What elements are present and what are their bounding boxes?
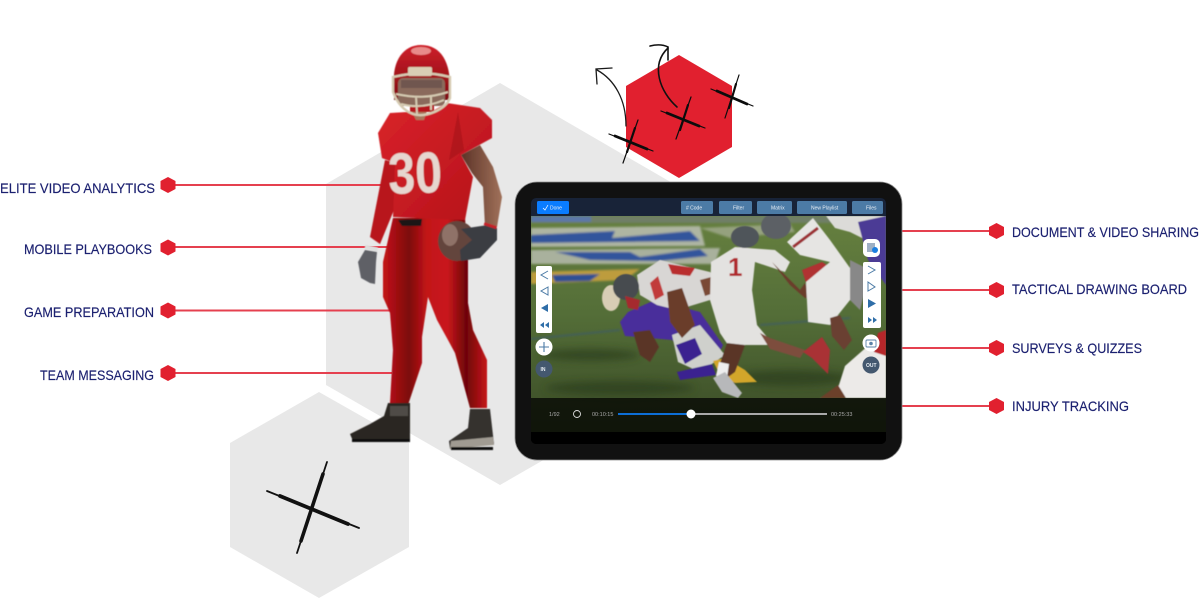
left glove (358, 245, 378, 284)
big brush X mark (267, 462, 359, 553)
video screen (531, 198, 886, 444)
in marker button (536, 360, 552, 378)
right cleat (449, 409, 494, 450)
right feature list (900, 223, 1199, 414)
control bar (531, 398, 886, 433)
callout: tactical drawing board: TACTICAL DRAWING BOARD (1012, 281, 1187, 297)
callout: injury tracking: INJURY TRACKING (1012, 398, 1129, 414)
in marker button: IN (540, 367, 546, 373)
matrix button (757, 201, 792, 214)
football (438, 221, 476, 261)
done button (537, 201, 569, 214)
left feature list (0, 177, 392, 383)
X mark centre (661, 97, 705, 139)
callout: team messaging (40, 365, 392, 383)
callout: document and video sharing (900, 223, 1199, 240)
tablet body (515, 182, 902, 460)
player number 1: 1 (728, 252, 742, 282)
playback timeline: 00:25:33 (831, 412, 852, 418)
large grey hexagon background (326, 83, 674, 485)
right arm (461, 145, 502, 227)
callout: tactical drawing board (900, 281, 1187, 298)
play diagram: X marks and arrows (596, 45, 753, 163)
callout: surveys and quizzes (900, 340, 1142, 356)
top bar (531, 198, 886, 216)
filter button (719, 201, 752, 214)
filter button: Filter (733, 206, 744, 212)
jersey top right (826, 216, 886, 310)
add button (536, 338, 552, 356)
neck (410, 108, 428, 120)
callout: injury tracking (900, 398, 1129, 414)
jersey number: 30 (387, 140, 443, 207)
red hexagon (626, 55, 732, 178)
player number 1 (710, 226, 838, 398)
X mark lower left (609, 120, 653, 163)
tablet (515, 182, 902, 460)
football player (350, 45, 502, 450)
playback timeline: 00:10:15 (592, 412, 613, 418)
code button: # Code (686, 206, 702, 212)
grey helmet (613, 274, 639, 300)
purple player (620, 300, 757, 383)
callout: mobile playbooks: MOBILE PLAYBOOKS (24, 241, 152, 257)
matrix button: Matrix (771, 206, 785, 212)
pants (383, 218, 487, 408)
third player (760, 213, 852, 374)
grass shadows (540, 349, 850, 395)
helmet (393, 45, 450, 115)
callout: elite video analytics (0, 177, 384, 196)
playback timeline: 1/92 (549, 412, 560, 418)
code button (681, 201, 713, 214)
players tackling (602, 213, 886, 398)
callout: game preparation (24, 302, 392, 320)
arrow left (596, 68, 626, 126)
callout: elite video analytics: ELITE VIDEO ANALYTICS (0, 180, 155, 196)
arrow centre (650, 45, 677, 107)
white helmet player (602, 285, 620, 311)
belt (398, 219, 422, 226)
jersey (378, 103, 492, 220)
out marker button (862, 356, 880, 374)
sleeve shadow (449, 112, 464, 160)
football field (531, 216, 886, 432)
right step controls (863, 262, 881, 328)
camera button (862, 334, 880, 352)
player bottom right (820, 330, 886, 398)
left arm sleeve (370, 160, 396, 244)
left step controls (536, 266, 552, 333)
X mark upper right (711, 75, 753, 118)
done button: Done (550, 206, 562, 212)
files button: Files (866, 206, 877, 212)
right glove (460, 225, 497, 261)
callout: team messaging: TEAM MESSAGING (40, 367, 154, 383)
new playlist button (797, 201, 847, 214)
new playlist button: New Playlist (811, 206, 839, 212)
files button (852, 201, 883, 214)
out marker button: OUT (866, 363, 877, 369)
small grey hexagon background (230, 392, 409, 598)
callout: game preparation: GAME PREPARATION (24, 304, 154, 320)
left cleat (350, 403, 410, 442)
end zone logo (531, 216, 886, 339)
callout: mobile playbooks (24, 240, 392, 257)
tackler 42 (636, 259, 712, 338)
callout: surveys and quizzes: SURVEYS & QUIZZES (1012, 340, 1142, 356)
shared document icon (863, 239, 880, 257)
playback timeline (549, 410, 852, 418)
